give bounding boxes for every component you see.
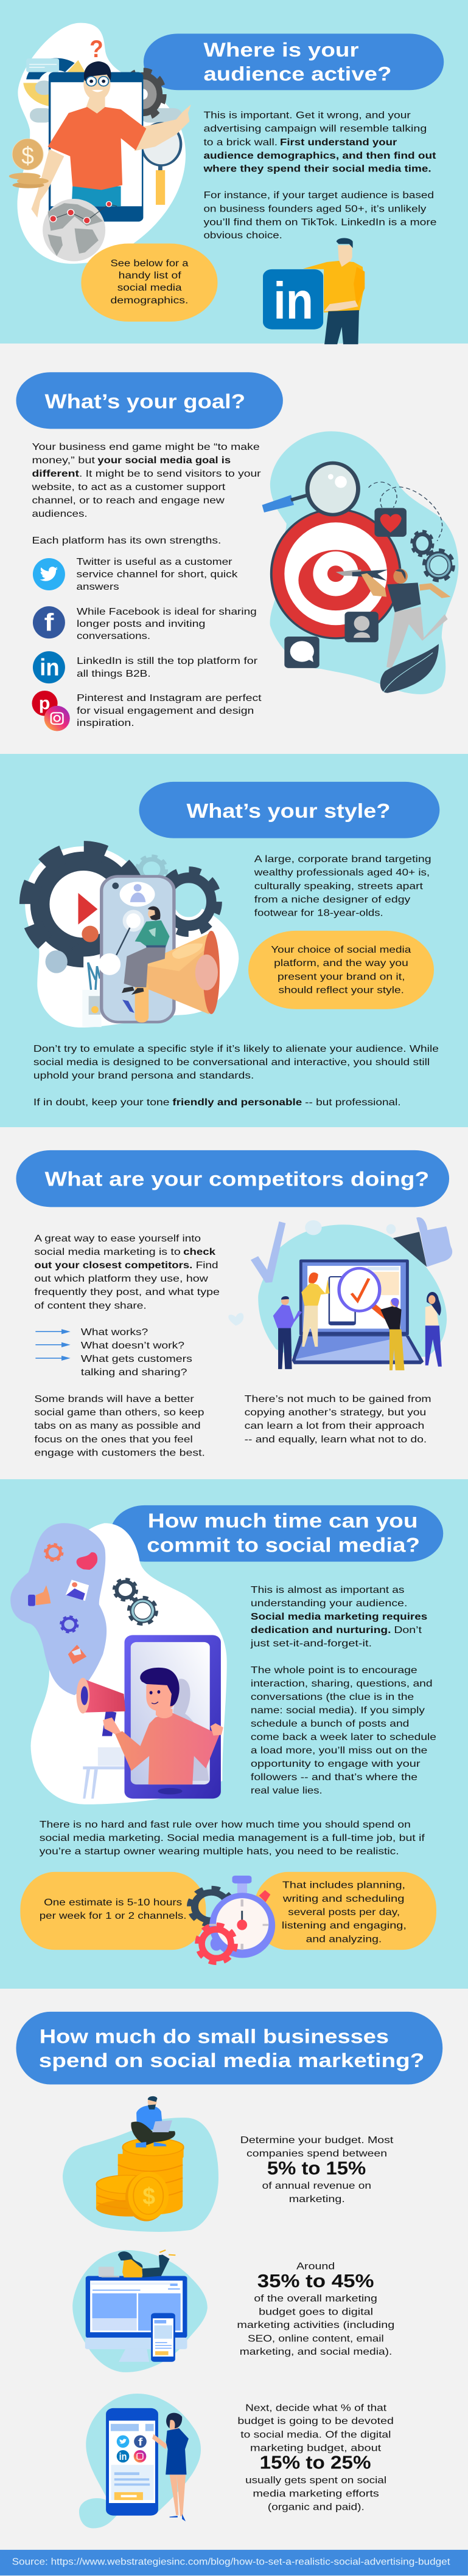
- text block: digital marketing share: 35% to 45%: [257, 2271, 374, 2291]
- callout: what it includes: writing and scheduling: [282, 1894, 404, 1904]
- icon: LinkedIn: in: [40, 655, 60, 681]
- callout: reflect your style: [248, 931, 434, 1009]
- text block: intro: First understand your: [280, 137, 397, 147]
- text block: determine budget: Determine your budget. Most: [240, 2135, 394, 2146]
- icon: dollar coins: [9, 139, 49, 188]
- text: LinkedIn: LinkedIn is still the top platform for: [77, 655, 257, 666]
- text block: check out competitors: of content they share.: [34, 1300, 147, 1311]
- callout: demographics list: social media: [117, 282, 183, 293]
- text: Facebook: longer posts and inviting: [77, 618, 205, 629]
- heading: Where is your: [203, 39, 358, 61]
- callout: demographics list: See below for a: [110, 258, 189, 269]
- text block: goal: money,” but: [32, 455, 95, 466]
- heading pill: What’s your goal?: [45, 390, 245, 413]
- illustration: woman with social phone: f: [138, 2437, 143, 2448]
- text block: social media share: 15% to 25%: [260, 2453, 371, 2473]
- text block: tone advice: social media is designed to be conversational and interactive, you should still: [33, 1057, 430, 1068]
- callout: reflect your style: Your choice of social media: [271, 944, 411, 955]
- callout: what it includes: That includes planning,: [282, 1880, 405, 1891]
- text: LinkedIn: all things B2B.: [77, 668, 151, 679]
- heading pill: [139, 782, 439, 838]
- text block: brand example: A large, corporate brand targeting: [254, 854, 431, 865]
- text: Pinterest and Instagram: [77, 692, 262, 728]
- text block: dedication: dedication and nurturing.: [251, 1625, 391, 1635]
- text block: digital marketing share: SEO, online content, email: [248, 2333, 384, 2344]
- heading: audience active?: [203, 63, 391, 85]
- text block: learn from approach: can learn a lot from their approach: [245, 1420, 424, 1431]
- icon: question mark: ?: [89, 36, 103, 63]
- text block: brand example: from a niche designer of edgy: [254, 894, 410, 905]
- text block: digital marketing share: budget goes to digital: [259, 2306, 373, 2317]
- text: Pinterest and Instagram: for visual engagement and design: [77, 705, 254, 716]
- list: questions: talking and sharing?: [81, 1367, 187, 1378]
- illustration: woman with social phone: in: [119, 2451, 127, 2463]
- text block: goal: website, to act as a customer support: [31, 482, 225, 492]
- text block: example: you’ll find them on TikTok. LinkedIn is a more: [203, 216, 436, 227]
- panel: what's your style: [25, 782, 439, 1108]
- text block: dedication: understanding your audience.: [251, 1598, 407, 1609]
- text block: whole point: [251, 1664, 436, 1796]
- heading: How much time can you: [148, 1510, 418, 1532]
- text block: check out competitors: out your closest competitors.: [34, 1260, 192, 1271]
- text block: no hard and fast rule: you’re a startup owner wearing multiple hats, you need to be realistic.: [40, 1846, 399, 1857]
- panel: time estimate and budget heading: [16, 1872, 442, 2232]
- panel: competitors: [16, 1150, 452, 1458]
- section background: style: [0, 754, 468, 1127]
- text block: brand example: [254, 854, 431, 918]
- text block: tone advice: Don’t try to emulate a specific style if it’s likely to alienate your audience. While: [33, 1043, 439, 1054]
- text block: check out competitors: [34, 1233, 220, 1311]
- icon: stopwatch with gears: [190, 1876, 275, 1962]
- text block: goal: different: [32, 468, 79, 479]
- text block: goal: . It might be to send visitors to your: [79, 468, 261, 479]
- callout: time estimate: per week for 1 or 2 channels.: [40, 1911, 186, 1921]
- text block: tone advice: If in doubt, keep your tone: [33, 1097, 170, 1108]
- text block: social media share: marketing budget, about: [250, 2442, 381, 2453]
- text block: determine budget: of annual revenue on: [262, 2181, 371, 2191]
- text block: social media share: to social media. Of the digital: [240, 2429, 391, 2440]
- text block: dedication: just set-it-and-forget-it.: [250, 1638, 372, 1649]
- section background: time: [0, 1479, 468, 1989]
- text: Twitter: [77, 556, 238, 592]
- text block: social media share: media marketing efforts: [253, 2488, 379, 2499]
- text block: social media share: usually gets spent on social: [245, 2474, 386, 2485]
- illustration: team inspecting a laptop: [228, 1217, 452, 1370]
- text block: goal: [31, 441, 261, 546]
- text block: no hard and fast rule: There is no hard and fast rule over how much time you should spend on: [40, 1819, 411, 1830]
- text block: intro: This is important. Get it wrong, and your: [203, 109, 411, 120]
- text block: intro: advertising campaign will resemble talking: [203, 123, 427, 134]
- list: questions: [81, 1326, 192, 1378]
- text: Facebook: [77, 606, 257, 641]
- text block: learn from approach: There’s not much to be gained from: [245, 1393, 431, 1404]
- text block: whole point: The whole point is to encourage: [251, 1664, 417, 1675]
- heading pill: How much do small businesses: [40, 2026, 389, 2048]
- illustration: man pointing from a phone: [17, 23, 191, 264]
- callout: time estimate: One estimate is 5-10 hours: [44, 1897, 182, 1908]
- text block: digital marketing share: marketing activities (including: [237, 2319, 394, 2330]
- text block: keep tabs: social game than others, so keep: [34, 1407, 204, 1418]
- illustration: woman on desktop monitor: [72, 2250, 208, 2372]
- text block: learn from approach: copying another’s strategy, but you: [245, 1407, 426, 1418]
- icon: Twitter: [33, 558, 65, 590]
- text block: example: obvious choice.: [203, 230, 282, 241]
- heading pill: [110, 1505, 443, 1562]
- text block: whole point: come back a week later to schedule: [251, 1732, 436, 1742]
- text block: example: For instance, if your target audience is based: [203, 190, 434, 201]
- text block: example: on business founders aged 50+, it’s unlikely: [203, 203, 426, 214]
- text block: tone advice: -- but professional.: [305, 1097, 401, 1108]
- text block: keep tabs: focus on the ones that you feel: [34, 1434, 193, 1445]
- text block: no hard and fast rule: social media marketing. Social media management is a full-time job, but if: [40, 1832, 425, 1843]
- text block: determine budget: [240, 2135, 394, 2205]
- text block: intro: where they spend their social media time.: [203, 164, 431, 174]
- illustration: man on stack of coins: $: [142, 2183, 155, 2209]
- text block: dedication: Social media marketing requires: [251, 1611, 427, 1622]
- icon: Facebook: [33, 606, 65, 638]
- callout: reflect your style: present your brand on it,: [278, 971, 405, 982]
- text block: digital marketing share: of the overall marketing: [254, 2293, 377, 2304]
- text: Pinterest and Instagram: Pinterest and Instagram are perfect: [77, 692, 262, 703]
- section background: audience: [0, 0, 468, 344]
- text block: keep tabs: Some brands will have a better: [34, 1393, 194, 1404]
- text block: check out competitors: out which platform they use, how: [34, 1273, 208, 1284]
- text block: goal: Each platform has its own strengths.: [32, 534, 221, 546]
- callout: reflect your style: platform, and the way you: [274, 958, 408, 969]
- illustration: target, darts and social icons: [262, 431, 458, 694]
- text block: social media share: Next, decide what % of that: [245, 2402, 386, 2413]
- illustration: man holding LinkedIn logo: in: [273, 272, 313, 330]
- text: Twitter: answers: [77, 581, 119, 592]
- text: Twitter: service channel for short, quick: [77, 568, 238, 579]
- panel: where is your audience active: [9, 23, 444, 344]
- callout: time estimate: [20, 1872, 206, 1950]
- heading pill: What are your competitors doing?: [45, 1168, 429, 1190]
- heading pill: [16, 2012, 442, 2085]
- text block: check out competitors: A great way to ease yourself into: [34, 1233, 201, 1244]
- panel: how much time: [10, 1505, 443, 1857]
- text block: whole point: interaction, sharing, questions, and: [251, 1677, 433, 1689]
- text block: digital marketing share: Around: [296, 2260, 335, 2271]
- heading: [203, 39, 391, 85]
- callout: what it includes: listening and engaging,: [282, 1921, 407, 1931]
- text block: check out competitors: frequently they post, and what type: [34, 1286, 220, 1297]
- callout: demographics list: handy list of: [119, 270, 182, 280]
- panel: what's your goal: [16, 372, 458, 731]
- text block: goal: channel, or to reach and engage new: [32, 495, 225, 506]
- heading pill: [144, 33, 444, 90]
- text block: tone advice: uphold your brand persona and standards.: [33, 1070, 254, 1081]
- text block: dedication: Don’t: [394, 1625, 422, 1635]
- text block: check out competitors: check: [183, 1246, 215, 1257]
- arrows: [35, 1329, 71, 1361]
- text block: intro: to a brick wall.: [203, 137, 278, 147]
- text block: keep tabs: tabs on as many as possible and: [34, 1420, 201, 1431]
- text: LinkedIn: [77, 655, 257, 679]
- text block: social media share: budget is going to be devoted: [237, 2415, 394, 2426]
- callout: what it includes: [254, 1872, 436, 1950]
- text block: tone advice: friendly and personable: [172, 1097, 302, 1108]
- footer: source: [0, 2550, 468, 2575]
- text block: intro: audience demographics, and then find out: [203, 150, 436, 161]
- text block: whole point: real value lies.: [251, 1785, 323, 1796]
- text block: no hard and fast rule: [40, 1819, 425, 1857]
- text block: check out competitors: Find: [196, 1260, 218, 1271]
- text block: brand example: wealthy professionals aged 40+ is,: [254, 867, 430, 878]
- text block: determine budget: marketing.: [289, 2194, 345, 2205]
- icon: dollar coins: $: [21, 143, 34, 170]
- list: questions: What doesn’t work?: [81, 1340, 184, 1351]
- text: Facebook: conversations.: [77, 630, 150, 641]
- callout: reflect your style: should reflect your style.: [279, 984, 404, 995]
- illustration: woman with social phone: [79, 2394, 201, 2529]
- illustration: man in phone with megaphone: [10, 1523, 227, 1804]
- text block: whole point: opportunity to engage with your: [251, 1758, 421, 1769]
- text block: social media share: [237, 2402, 394, 2512]
- text block: digital marketing share: [237, 2260, 394, 2357]
- illustration: phone, gears, megaphone and man: [25, 846, 239, 1027]
- text: Facebook: While Facebook is ideal for sharing: [77, 606, 257, 617]
- text block: brand example: footwear for 18-year-olds.: [254, 907, 383, 918]
- list: questions: What works?: [81, 1326, 148, 1338]
- panel: budget steps and source: [0, 2250, 468, 2575]
- text block: check out competitors: social media marketing is to: [34, 1246, 181, 1257]
- callout: what it includes: and analyzing.: [306, 1934, 382, 1944]
- text block: whole point: name: social media). If you simply: [251, 1705, 425, 1716]
- text block: whole point: schedule a bunch of posts and: [251, 1718, 409, 1729]
- callout: what it includes: several posts per day,: [288, 1907, 400, 1918]
- text block: dedication: This is almost as important as: [251, 1584, 405, 1595]
- icon: Facebook: f: [44, 608, 54, 637]
- text block: determine budget: 5% to 15%: [267, 2158, 366, 2178]
- text block: example: [203, 190, 436, 241]
- text block: keep tabs: engage with customers the best.: [34, 1447, 205, 1458]
- text block: goal: Your business end game might be “to make: [32, 441, 260, 452]
- heading pill: [16, 1150, 449, 1207]
- heading: commit to social media?: [147, 1534, 420, 1556]
- text block: digital marketing share: marketing, and social media).: [240, 2346, 392, 2357]
- callout: demographics list: [81, 244, 218, 322]
- text block: social media share: (organic and paid).: [268, 2501, 365, 2512]
- icon: LinkedIn: [33, 651, 65, 683]
- heading pill: [16, 372, 283, 429]
- text block: learn from approach: -- and equally, learn what not to do.: [245, 1434, 427, 1445]
- text block: dedication: [250, 1584, 427, 1649]
- callout: demographics list: demographics.: [110, 295, 188, 306]
- heading: [147, 1510, 420, 1556]
- text block: whole point: a load more, you’ll miss out on the: [251, 1745, 427, 1756]
- text block: goal: your social media goal is: [97, 455, 231, 466]
- text block: determine budget: companies spend between: [246, 2149, 387, 2159]
- text: Twitter: Twitter is useful as a customer: [77, 556, 232, 567]
- icon: Pinterest and Instagram: p: [39, 693, 50, 713]
- list: questions: What gets customers: [81, 1353, 192, 1364]
- text block: keep tabs: [34, 1393, 205, 1458]
- text block: whole point: conversations (the clue is in the: [251, 1691, 414, 1702]
- text block: goal: audiences.: [32, 508, 88, 519]
- text block: whole point: followers -- and that’s where the: [251, 1772, 417, 1783]
- text: Pinterest and Instagram: inspiration.: [77, 717, 134, 728]
- heading pill: What’s your style?: [186, 799, 390, 822]
- text block: learn from approach: [245, 1393, 431, 1445]
- text block: intro: [203, 109, 436, 174]
- illustration: man holding LinkedIn logo: [263, 238, 365, 344]
- text block: brand example: culturally speaking, streets apart: [254, 880, 423, 891]
- illustration: man on stack of coins: [63, 2096, 218, 2232]
- icon: globe with pins: [43, 199, 117, 261]
- text block: tone advice: [33, 1043, 439, 1108]
- icon: Pinterest and Instagram: [32, 691, 70, 731]
